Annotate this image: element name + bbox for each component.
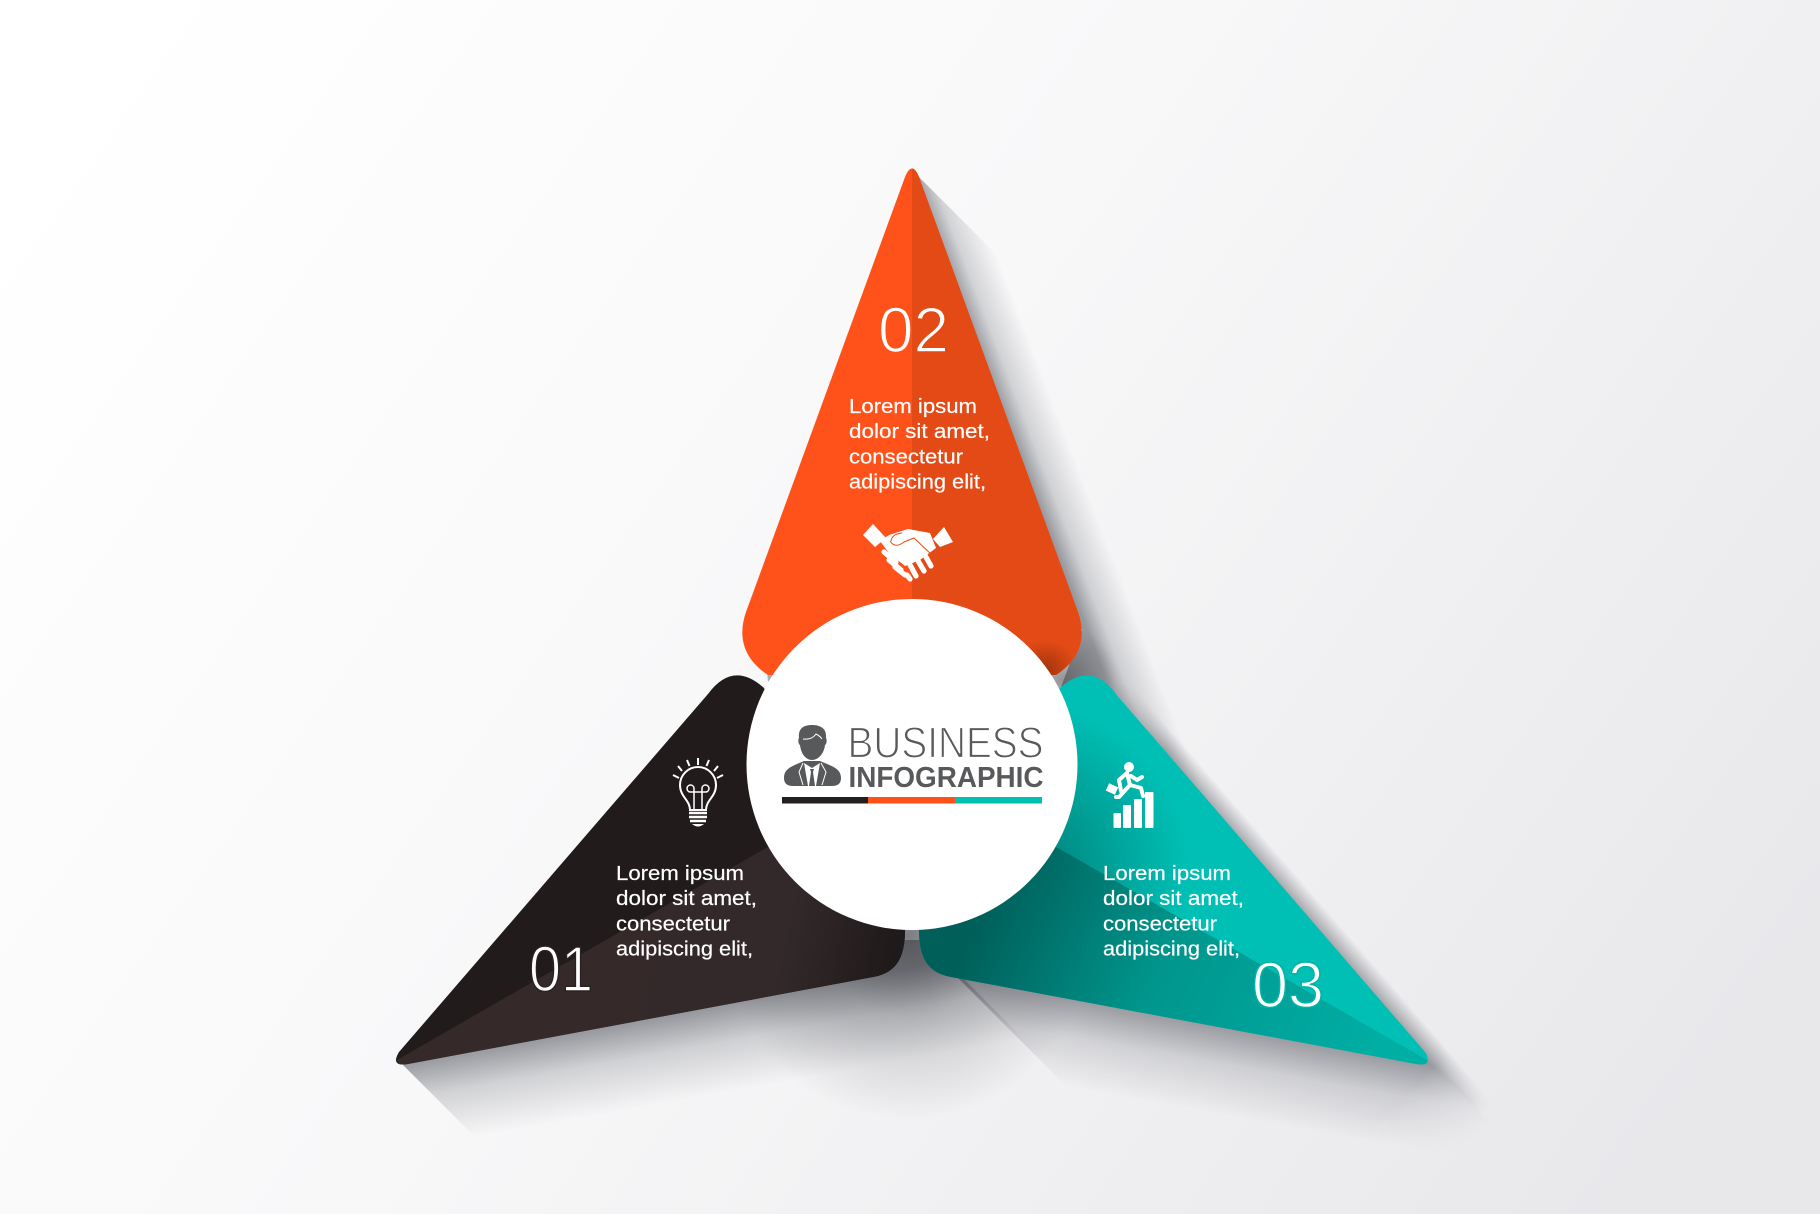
text: lorem ipsum: consectetur	[616, 912, 730, 936]
text: lorem ipsum: dolor sit amet,	[616, 887, 757, 910]
panel: 01 black	[396, 675, 930, 1080]
icon: runner on bars	[1106, 762, 1154, 828]
text: lorem ipsum: adipiscing elit,	[1103, 938, 1240, 960]
black shape	[396, 675, 905, 1064]
center circle	[746, 599, 1078, 930]
icon: light bulb	[673, 758, 723, 826]
panel: 03 teal	[918, 675, 1428, 1064]
text: lorem ipsum: consectetur	[1103, 912, 1217, 936]
tri-colour bar	[782, 797, 1042, 804]
text: lorem ipsum: Lorem ipsum	[849, 395, 977, 418]
number 03: 03	[1252, 949, 1324, 1021]
text: lorem ipsum	[1103, 862, 1244, 960]
text: lorem ipsum: dolor sit amet,	[849, 420, 990, 443]
text: lorem ipsum: consectetur	[849, 446, 963, 468]
number 01: 01	[529, 933, 593, 1005]
black fold	[397, 848, 905, 1064]
teal shape	[919, 675, 1428, 1064]
long shadows	[402, 177, 1479, 1130]
orange shape	[742, 168, 1082, 675]
icon: handshake	[863, 524, 953, 579]
text: lorem ipsum: adipiscing elit,	[849, 470, 986, 494]
heading: infographic: INFOGRAPHIC	[848, 762, 1044, 794]
text: lorem ipsum	[849, 395, 990, 494]
panel: 02 orange	[742, 160, 1092, 704]
orange fold	[912, 168, 1082, 675]
heading: business: BUSINESS	[848, 718, 1044, 768]
center logo	[782, 718, 1044, 804]
text: lorem ipsum: Lorem ipsum	[1103, 862, 1231, 885]
text: lorem ipsum: adipiscing elit,	[616, 938, 753, 960]
icon: businessman	[784, 725, 841, 786]
text: lorem ipsum: Lorem ipsum	[616, 862, 744, 885]
number 02: 02	[878, 294, 949, 366]
teal fold	[918, 732, 1427, 1064]
text: lorem ipsum	[616, 862, 757, 960]
text: lorem ipsum: dolor sit amet,	[1103, 887, 1244, 910]
